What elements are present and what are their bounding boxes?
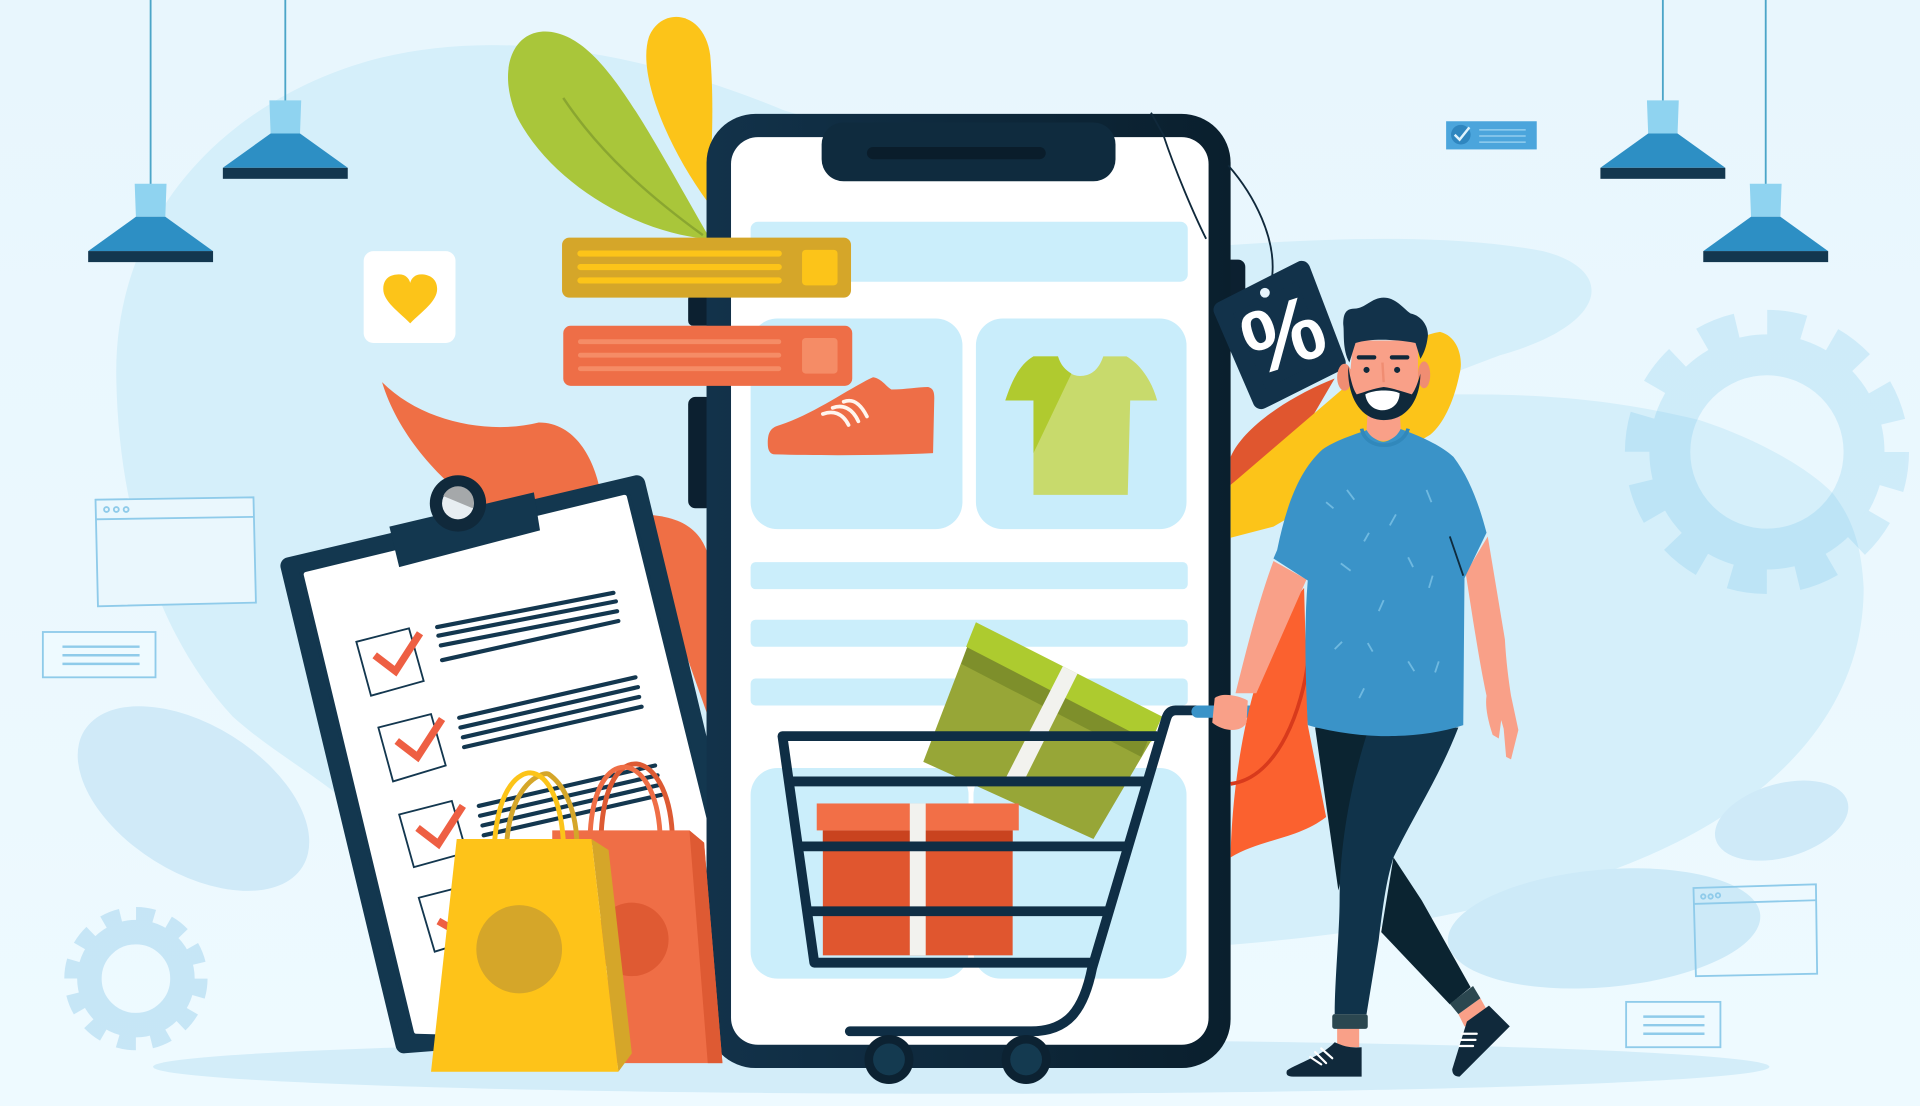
discount percent sign: % — [1230, 275, 1338, 396]
man: left arm — [1236, 561, 1307, 693]
man: neck — [1367, 410, 1401, 441]
man: arms — [1236, 536, 1518, 759]
cart wheel 2 — [1002, 1035, 1051, 1084]
man: eyes and brows — [1357, 355, 1409, 373]
floating browser window left — [96, 497, 256, 606]
screen text lines — [751, 562, 1188, 705]
icon: small gear left — [71, 914, 201, 1044]
man: cuffs — [1332, 986, 1480, 1029]
man: right shoe — [1452, 1006, 1510, 1077]
banner: gold — [562, 238, 851, 298]
leaf: green — [508, 31, 707, 239]
man: ears — [1337, 361, 1430, 391]
product card: t-shirt — [976, 318, 1187, 529]
leaf: yellow top — [646, 17, 712, 202]
clipboard — [289, 475, 765, 1045]
lamp 3 — [1600, 0, 1725, 179]
man: left shoe — [1287, 1042, 1362, 1077]
man: ankles — [1337, 998, 1487, 1047]
product card: shoe — [751, 318, 962, 529]
man: right arm with hand — [1466, 536, 1518, 759]
man — [1212, 298, 1518, 1077]
gift box: green — [923, 622, 1162, 839]
leaves behind man — [1231, 332, 1461, 538]
price tag — [1222, 269, 1338, 401]
cart wheel 1 — [864, 1035, 913, 1084]
leaf: orange behind clipboard — [382, 382, 710, 723]
floating browser window right — [1693, 884, 1817, 976]
man: smile — [1365, 391, 1400, 410]
man: back leg — [1315, 728, 1471, 1004]
leaf: red — [1231, 378, 1335, 485]
heart card — [364, 251, 456, 343]
phone — [707, 114, 1231, 1068]
phone notch — [822, 122, 1116, 181]
man: hand on cart — [1212, 695, 1248, 730]
shopping bag: orange — [552, 764, 722, 1063]
man: hair — [1343, 298, 1428, 363]
man: head — [1337, 298, 1430, 420]
floor shadow — [153, 1040, 1769, 1094]
checklist row 2 — [378, 677, 642, 781]
side buttons — [688, 260, 1245, 508]
icon: large gear right — [1638, 323, 1896, 581]
banner: orange — [563, 326, 852, 386]
hanging lamps — [88, 0, 1828, 262]
checklist row 3 — [399, 766, 661, 867]
floating text card left — [43, 632, 156, 677]
leaf: yellow — [1231, 332, 1461, 538]
floating text card right — [1626, 1002, 1720, 1047]
lamp 2 — [223, 0, 348, 179]
lamp 4 — [1703, 0, 1828, 262]
cart handle grip — [1198, 707, 1259, 717]
shopping bag: yellow — [431, 773, 632, 1072]
man: t-shirt — [1273, 429, 1487, 736]
checklist row 1 — [356, 593, 618, 696]
price tag strings — [1151, 113, 1273, 276]
lamp 1 — [88, 0, 213, 262]
man: face — [1349, 340, 1418, 420]
man: front leg — [1335, 728, 1458, 1014]
checklist row 4 — [419, 884, 486, 952]
man: beard — [1348, 366, 1420, 420]
screen header bar — [751, 222, 1188, 282]
clipboard clip — [389, 475, 540, 567]
man: nose — [1382, 363, 1384, 382]
cape: orange leaf behind man — [1231, 588, 1326, 857]
gift box: red — [817, 803, 1019, 955]
bottom product cards — [751, 768, 1187, 979]
shopping cart — [782, 710, 1259, 1084]
blue checked badge — [1446, 121, 1537, 149]
